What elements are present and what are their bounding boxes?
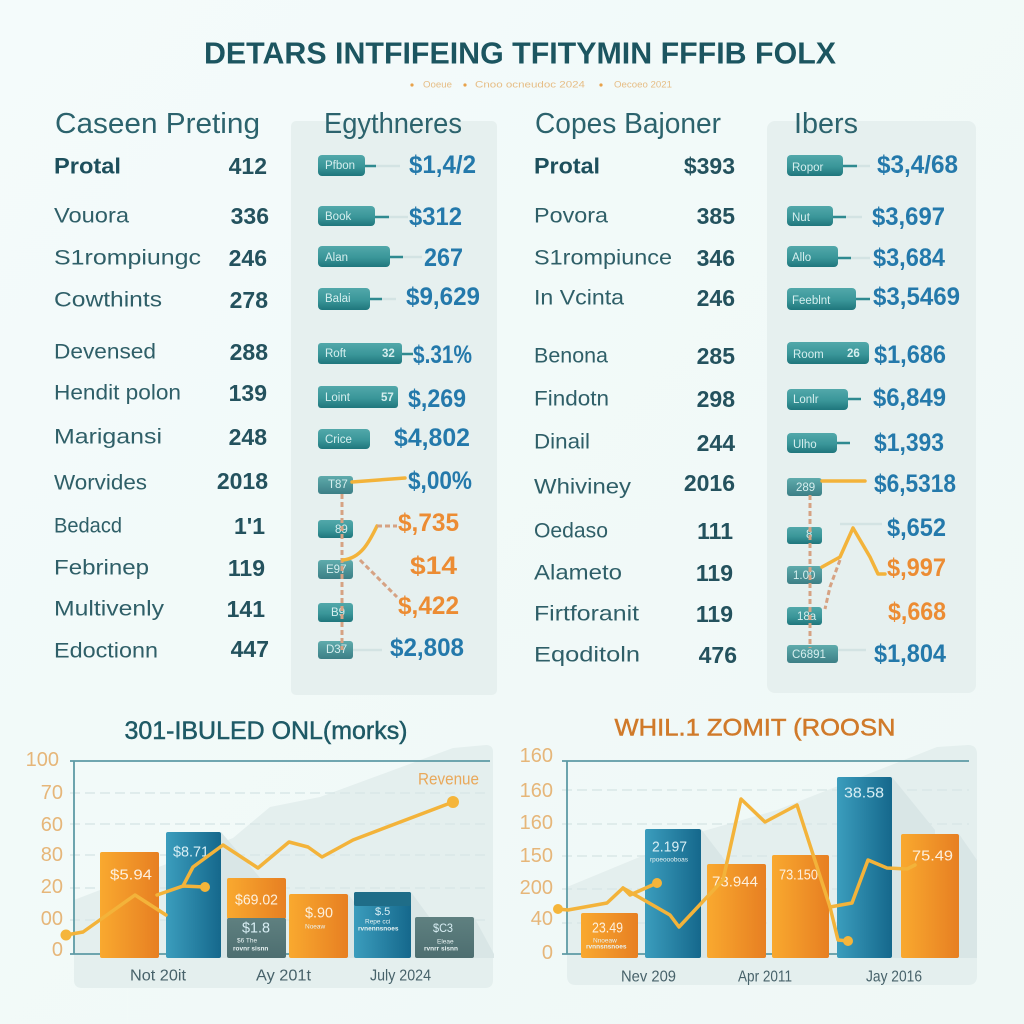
bars: rvnennsnoes (358, 926, 399, 932)
right column pills: 26 (847, 348, 860, 360)
y axis labels: 0 (542, 942, 553, 964)
row counts: 278 (230, 287, 268, 313)
bars: $.90 (305, 904, 333, 922)
row labels: Protal (534, 154, 600, 178)
left column pills: E97 (326, 564, 346, 576)
row labels: Bedacd (54, 514, 122, 538)
row counts: 447 (231, 636, 269, 662)
y axis labels: 60 (41, 814, 63, 836)
right column values: $6,849 (873, 384, 946, 412)
right column values: $1,686 (874, 341, 946, 369)
chart background (74, 745, 493, 988)
row labels: Devensed (54, 340, 156, 364)
left column values: $,269 (408, 385, 466, 413)
y axis labels: 200 (520, 877, 553, 899)
chart title: 301-IBULED ONL(morks) (124, 717, 408, 745)
row labels: Edoctionn (54, 640, 158, 662)
row labels: Whiviney (534, 476, 632, 498)
right column pills: 1.00 (793, 570, 815, 582)
bars: rpoeoooboas (650, 856, 689, 864)
y axis labels: 40 (531, 908, 553, 930)
chart: left (26, 717, 494, 988)
x axis labels (130, 968, 431, 984)
y axis labels (26, 749, 63, 961)
row labels: Dinail (534, 430, 590, 454)
y axis labels: 20 (41, 876, 63, 898)
row counts: 288 (230, 339, 268, 365)
bars: $69.02 (235, 892, 278, 908)
x axis labels: Ay 201t (256, 968, 312, 984)
panel: right shaded column (767, 121, 976, 693)
left column values: 267 (424, 244, 463, 272)
left column values: $,00% (408, 467, 472, 495)
heading: Caseen Preting: Caseen Preting (55, 108, 260, 140)
left column values: $.31% (413, 341, 472, 369)
bars: $8.71 (173, 844, 209, 860)
left column pills: Pfbon (325, 160, 355, 172)
heading: Copes Bajoner: Copes Bajoner (535, 108, 721, 140)
bars: $1.8 (242, 920, 270, 936)
bars: 73.944 (712, 874, 758, 890)
bars: Nnoeaw (593, 938, 617, 944)
y axis and gridlines (70, 761, 490, 954)
row counts (217, 153, 269, 662)
bars: 2.197 (652, 838, 687, 856)
row labels: Benona (534, 344, 608, 368)
x axis labels: July 2024 (370, 968, 431, 984)
row labels: Firtforanit (534, 602, 639, 626)
right column pills: 289 (796, 482, 815, 494)
revenue line (60, 796, 459, 940)
bars: 75.49 (912, 848, 953, 864)
row labels (534, 154, 672, 666)
left column header: Egythneres (324, 108, 462, 140)
left column values: $,422 (398, 592, 459, 620)
y axis labels: 150 (520, 845, 553, 867)
right column pills: Feeblnt (792, 295, 831, 307)
right column values: $3,5469 (873, 283, 960, 311)
right column pills: Allo (792, 252, 811, 264)
left column pills: 57 (381, 392, 394, 404)
y axis labels: 100 (26, 749, 59, 771)
chart: right (520, 714, 977, 986)
row counts (684, 153, 737, 668)
title: DETARS INTFIFEING TFITYMIN FFFIB FOLX (204, 36, 836, 70)
bars: rovnr sisnn (233, 946, 268, 952)
left column pills: Roft (325, 348, 347, 360)
left column pills: Book (325, 211, 351, 223)
subtitle legend (410, 80, 672, 90)
row counts: 246 (229, 245, 267, 271)
bars: 73.150 (779, 866, 818, 884)
left column values (390, 151, 480, 662)
y axis labels: 80 (41, 844, 63, 866)
left column pills (318, 155, 422, 659)
row labels: S1rompiunce (534, 246, 672, 270)
revenue label: Revenue (418, 770, 479, 788)
row counts: 111 (697, 518, 733, 544)
row labels: Vouora (54, 204, 129, 228)
right column pills: Lonlr (793, 394, 819, 406)
left table (54, 108, 269, 662)
y axis labels: 70 (41, 782, 63, 804)
y axis labels: 00 (41, 908, 63, 930)
left column values: $,735 (398, 509, 459, 537)
y axis labels: 0 (52, 939, 63, 961)
row counts: 119 (696, 601, 733, 627)
right column pills: 18a (797, 611, 817, 623)
right column pills: Ulho (793, 439, 817, 451)
subtitle legend: Ooeue (423, 80, 452, 90)
bars: $.5 (375, 906, 390, 918)
x axis labels: Nev 209 (621, 968, 676, 986)
left column pills: Alan (325, 252, 348, 264)
row labels: Hendit polon (54, 382, 181, 404)
right column pills: C6891 (792, 649, 826, 661)
right column pills (787, 155, 870, 663)
row counts: 244 (697, 430, 735, 456)
row labels: Alameto (534, 562, 622, 584)
row counts: 248 (229, 424, 267, 450)
row labels: Povora (534, 204, 608, 228)
x axis labels: Apr 2011 (738, 968, 792, 986)
y axis labels: 160 (520, 812, 553, 834)
left column pills: 32 (382, 348, 395, 360)
chart background (567, 745, 977, 985)
bars: Eleae (437, 938, 454, 946)
left column values: $14 (410, 552, 457, 580)
x axis labels: Jay 2016 (866, 968, 922, 986)
left column pills: D37 (326, 644, 347, 656)
row counts: 346 (697, 245, 735, 271)
subtitle legend: Cnoo ocneudoc 2024 (475, 80, 585, 90)
bars: $6 The (237, 938, 258, 944)
row labels: Marigansi (54, 426, 162, 448)
right table (534, 108, 737, 668)
chart title: WHIL.1 ZOMIT (ROOSN (614, 714, 896, 742)
row counts: 139 (229, 380, 267, 406)
right column pills: Room (793, 349, 824, 361)
right column values: $3,4/68 (877, 151, 958, 179)
x axis labels (621, 968, 922, 986)
left column values: $312 (409, 203, 462, 231)
row counts: 285 (697, 343, 735, 369)
right column pills: Ropor (792, 162, 823, 174)
bars: $5.94 (110, 866, 152, 884)
left column values: $1,4/2 (409, 151, 476, 179)
row counts: 2018 (217, 468, 268, 494)
right column values: $,652 (887, 514, 946, 542)
left column pills: T87 (328, 479, 348, 491)
row labels: Protal (54, 154, 121, 178)
left column pills: B9 (331, 607, 345, 619)
bars: rvnrr sisnn (424, 946, 458, 952)
row counts: 476 (699, 642, 737, 668)
right column pills: Nut (792, 212, 811, 224)
bars: 23.49 (592, 920, 623, 936)
row counts: 119 (696, 560, 733, 586)
right connector lines (810, 481, 885, 648)
left column pills: Loint (325, 392, 351, 404)
bars: Repe cci (365, 918, 390, 926)
right column values: $1,393 (874, 429, 944, 457)
row counts: 298 (697, 386, 735, 412)
row counts: 2016 (684, 470, 735, 496)
bars (100, 832, 494, 958)
left connector lines (342, 478, 405, 650)
panel: left shaded column (291, 121, 497, 695)
row labels: Multivenly (54, 598, 165, 620)
row labels (54, 154, 201, 662)
row counts: $393 (684, 153, 735, 179)
row labels: S1rompiungc (54, 246, 201, 270)
right column values: $1,804 (874, 640, 946, 668)
row labels: Eqoditoln (534, 644, 640, 666)
right column values: $3,697 (872, 203, 945, 231)
row counts: 412 (229, 153, 267, 179)
y axis labels: 160 (520, 745, 553, 767)
left column pills: Crice (325, 434, 352, 446)
row labels: In Vcinta (534, 286, 624, 310)
left column pills: 89 (335, 524, 348, 536)
bars: Noeaw (305, 924, 326, 930)
left column values: $4,802 (394, 424, 470, 452)
bars: $C3 (433, 921, 453, 935)
subtitle legend: Oecoeo 2021 (614, 80, 672, 90)
bars: rvnnsnsnoes (586, 944, 627, 950)
row counts: 1'1 (234, 513, 265, 539)
right column pills: 8 (806, 529, 812, 541)
right column values: $,997 (887, 554, 946, 582)
x axis labels: Not 20it (130, 968, 187, 984)
left column values: $9,629 (406, 283, 480, 311)
row labels: Findotn (534, 388, 609, 410)
row counts: 385 (697, 203, 735, 229)
right column values: $,668 (888, 598, 946, 626)
left column pills: Balai (325, 293, 351, 305)
row counts: 141 (227, 596, 265, 622)
y axis labels: 160 (520, 780, 553, 802)
row counts: 336 (231, 203, 269, 229)
right column values: $3,684 (873, 244, 945, 272)
y axis and gridlines (562, 761, 969, 954)
right column header: Ibers (794, 108, 858, 140)
row counts: 246 (697, 285, 735, 311)
left column values: $2,808 (390, 634, 464, 662)
line series (553, 799, 915, 946)
row labels: Febrinep (54, 556, 149, 580)
row counts: 119 (228, 555, 265, 581)
right column values (872, 151, 960, 668)
row labels: Oedaso (534, 520, 608, 542)
bars: 38.58 (844, 784, 884, 802)
row labels: Worvides (54, 472, 147, 494)
bars (581, 777, 977, 958)
y axis labels (520, 745, 553, 964)
right column values: $6,5318 (874, 470, 956, 498)
row labels: Cowthints (54, 288, 162, 312)
